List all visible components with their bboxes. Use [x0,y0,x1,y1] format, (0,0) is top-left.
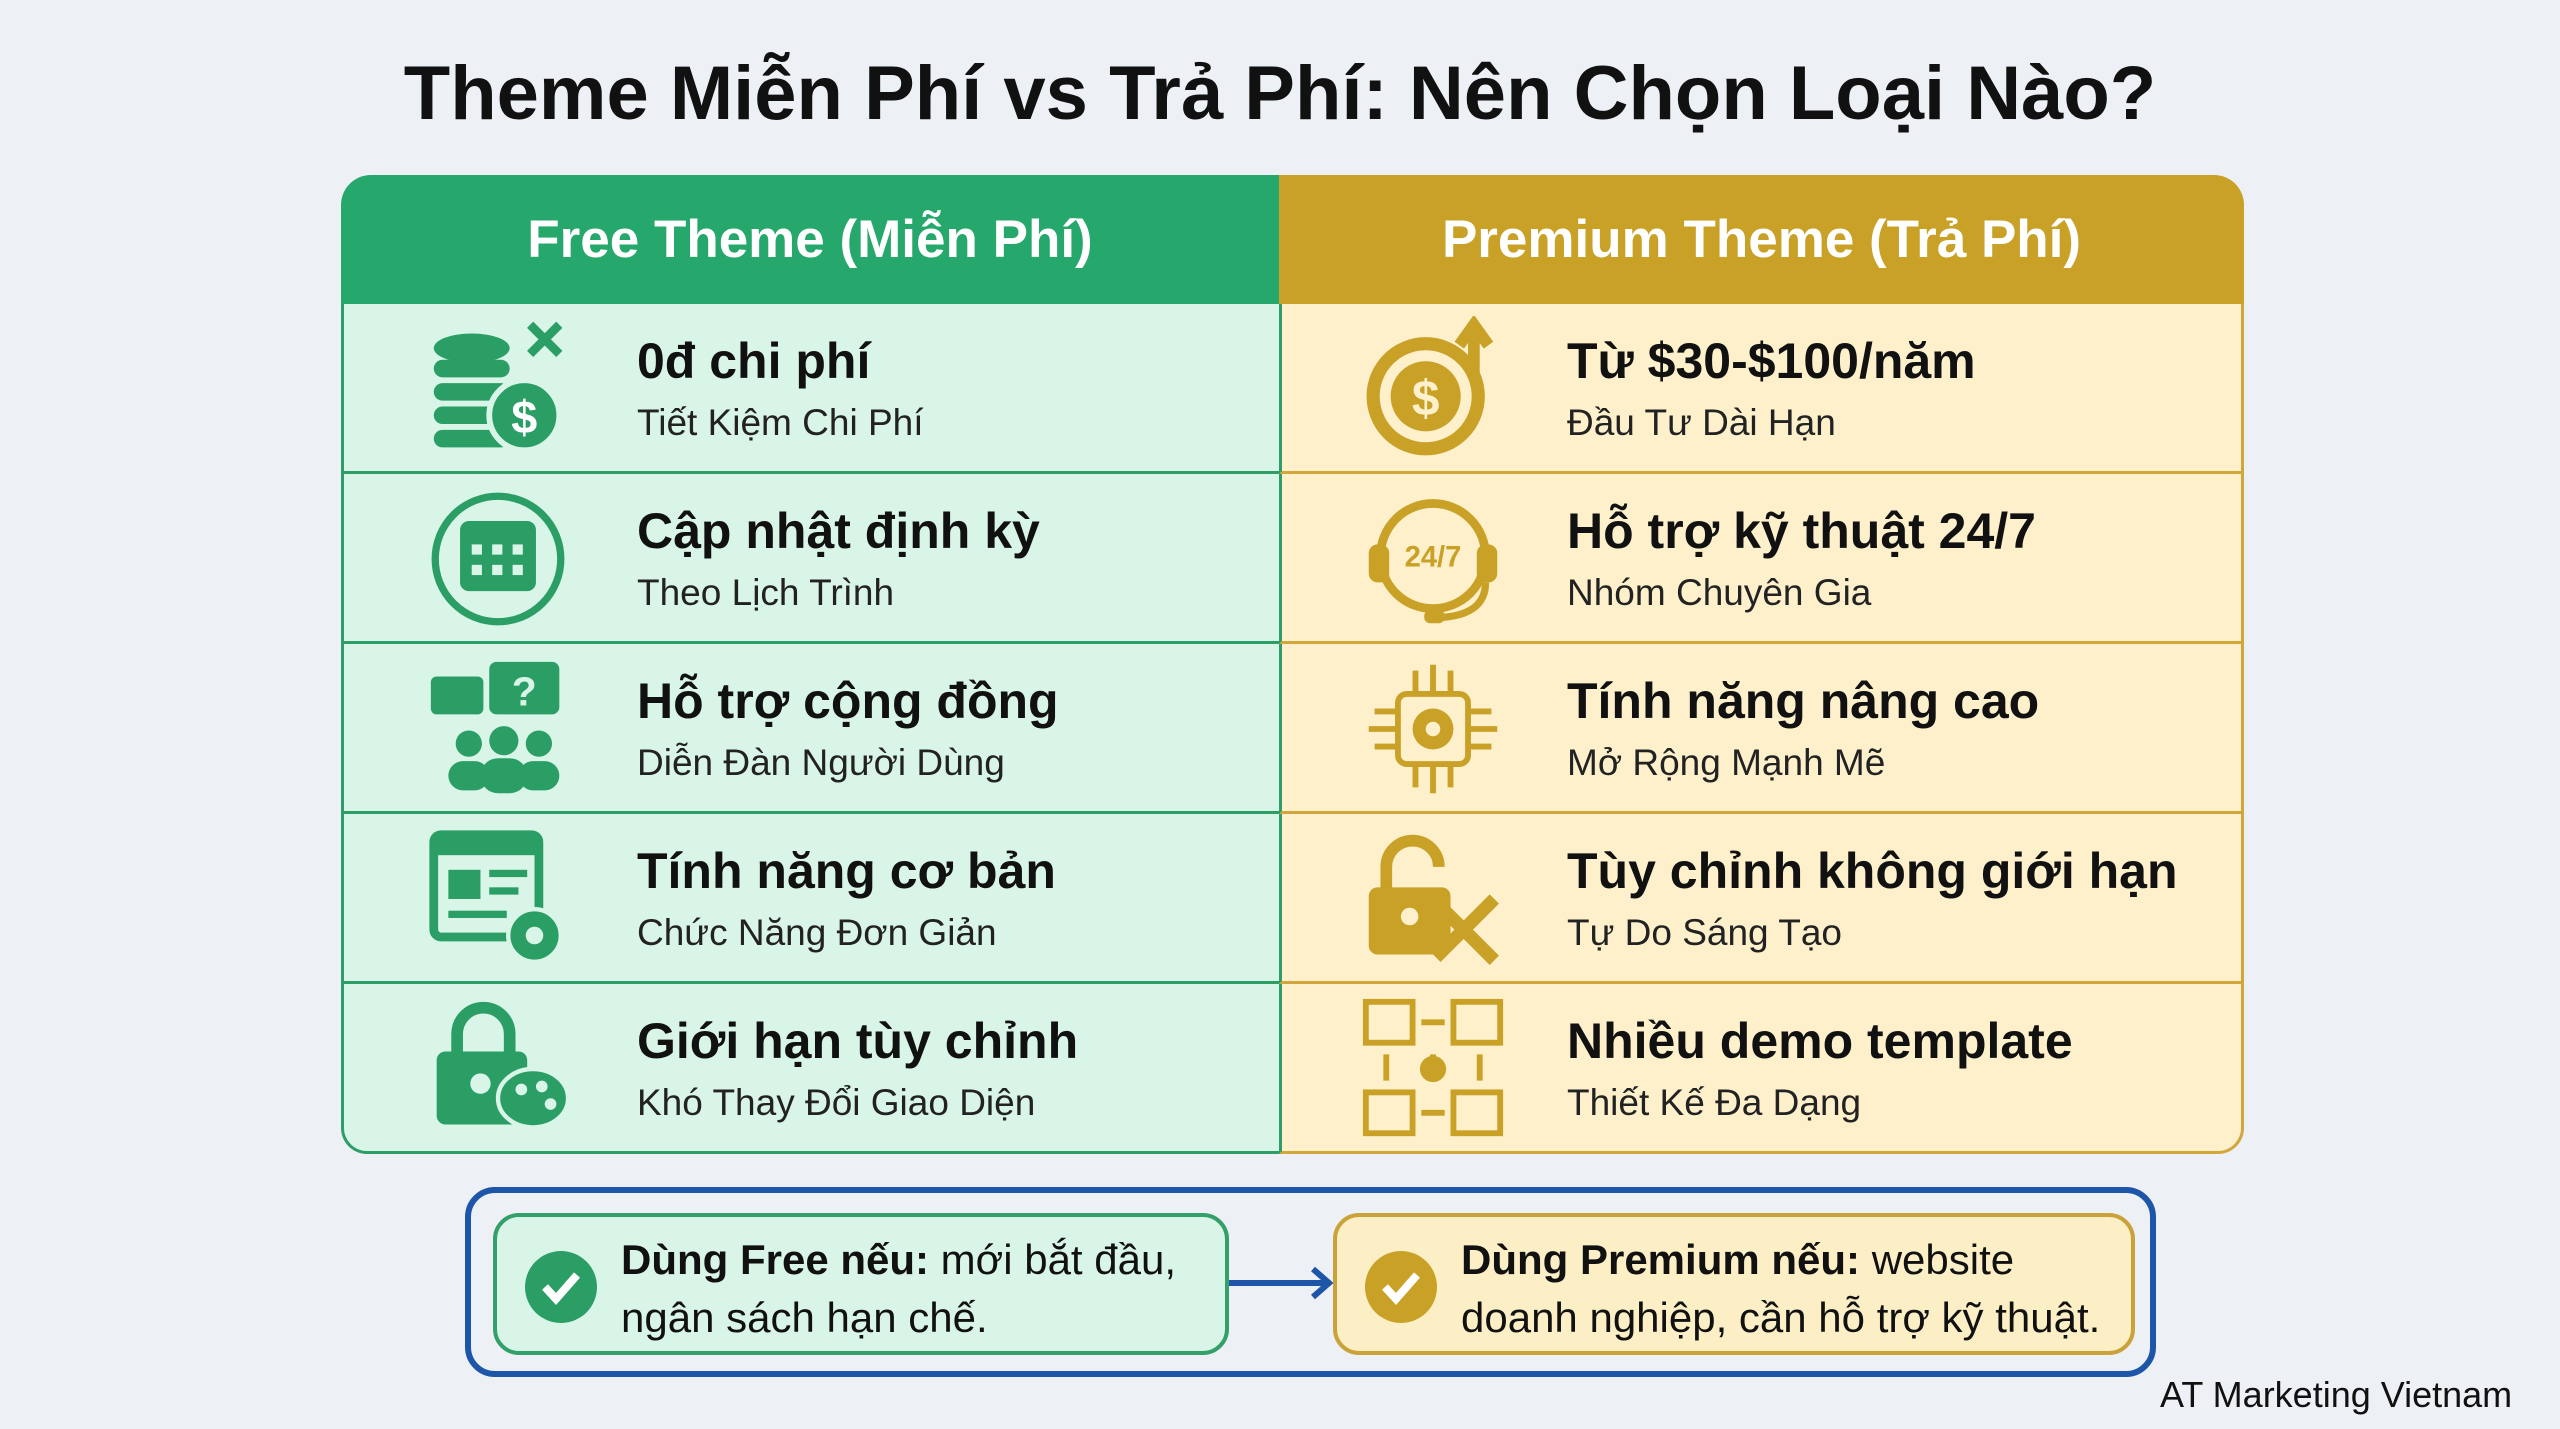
row 1 free: Tiết Kiệm Chi Phí [637,402,924,443]
icon: templates [1362,998,1504,1136]
row 3 free [341,644,1279,814]
row 2 free: Theo Lịch Trình [637,572,894,613]
row 3 premium: Mở Rộng Mạnh Mẽ [1567,742,1885,783]
row 4 premium [1279,814,2244,984]
arrow [1229,1266,1333,1300]
icon: check gold [1365,1251,1437,1323]
row 2 premium [1279,474,2244,644]
icon: dollar growth: $ [1412,370,1440,426]
row 1 free: 0đ chi phí [637,333,870,389]
icon: headset 24/7 [1368,499,1498,624]
recommendation container [465,1187,2156,1377]
row 1 premium: Đầu Tư Dài Hạn [1567,402,1836,443]
callout: free [493,1213,1229,1355]
icon: lock palette [436,1002,566,1126]
row 4 free [341,814,1279,984]
row 2 free [341,474,1279,644]
row 2 premium: Nhóm Chuyên Gia [1567,572,1871,613]
row 1 premium [1279,304,2244,474]
title: Theme Miễn Phí vs Trả Phí: Nên Chọn Loại Nào? [404,51,2156,136]
footer brand: AT Marketing Vietnam [2160,1374,2512,1415]
header: free [341,175,1279,304]
callout: premium: doanh nghiệp, cần hỗ trợ kỹ thuật. [1461,1294,2100,1341]
icon: coins: $ [511,391,537,443]
row 3 free: Diễn Đàn Người Dùng [637,742,1005,783]
row 4 premium: Tự Do Sáng Tạo [1567,912,1842,953]
icon: check green [525,1251,597,1323]
icon: coins [434,322,562,448]
row 1 premium: Từ $30-$100/năm [1567,333,1976,389]
row 2 free: Cập nhật định kỳ [637,503,1040,559]
icon: dollar growth [1366,316,1494,456]
callout: free: Dùng Free nếu: mới bắt đầu, [621,1236,1176,1283]
row 1 free [341,304,1279,474]
row 5 free: Khó Thay Đổi Giao Diện [637,1082,1035,1123]
row 5 premium: Nhiều demo template [1567,1013,2073,1069]
header: premium: Premium Theme (Trả Phí) [1442,210,2081,269]
icon: chip gear [1368,664,1498,794]
row 4 free: Chức Năng Đơn Giản [637,912,997,953]
callout: free: ngân sách hạn chế. [621,1294,988,1341]
row 4 premium: Tùy chỉnh không giới hạn [1567,843,2178,899]
row 5 free [341,984,1279,1154]
row 3 premium: Tính năng nâng cao [1567,673,2039,729]
row 4 free: Tính năng cơ bản [637,843,1056,899]
row 3 premium [1279,644,2244,814]
icon: unlock tools [1368,834,1499,965]
row 5 free: Giới hạn tùy chỉnh [637,1013,1078,1069]
row 2 premium: Hỗ trợ kỹ thuật 24/7 [1567,503,2036,559]
header: free: Free Theme (Miễn Phí) [527,210,1093,269]
icon: calendar cycle [432,492,564,626]
icon: browser gear [429,830,559,960]
row 5 premium [1279,984,2244,1154]
icon: community [430,662,560,794]
row 5 premium: Thiết Kế Đa Dạng [1567,1082,1861,1123]
callout: premium [1333,1213,2135,1355]
icon: headset 24/7: 24/7 [1405,541,1461,573]
header: premium [1279,175,2244,304]
callout: premium: Dùng Premium nếu: website [1461,1236,2014,1283]
icon: community: ? [512,669,537,715]
row 3 free: Hỗ trợ cộng đồng [637,673,1059,729]
